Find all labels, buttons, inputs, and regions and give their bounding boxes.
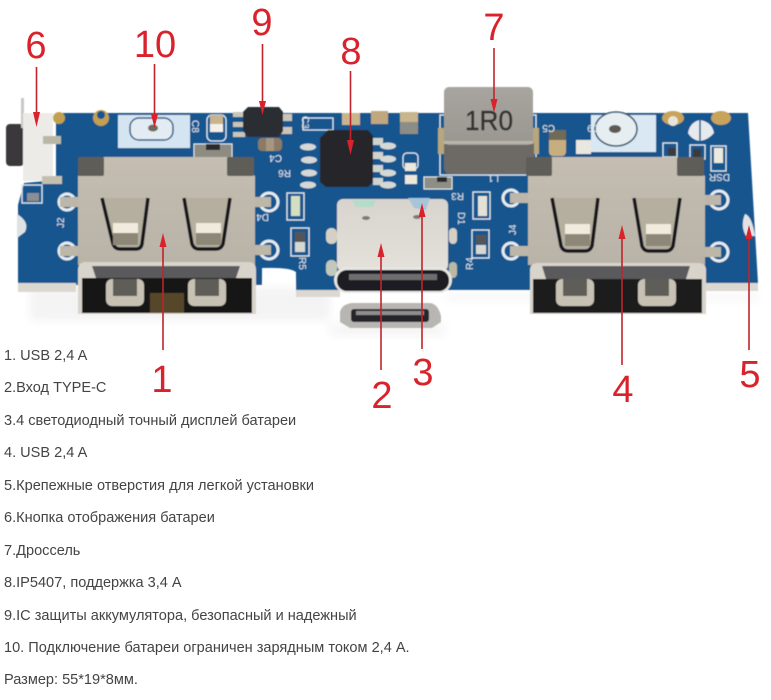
number 3 with arrow <box>412 203 434 394</box>
number 10 with arrow: 10 <box>134 24 176 66</box>
number 6 with arrow: 6 <box>25 25 47 67</box>
silk labels top left: C4 <box>269 152 282 163</box>
inductor 7 <box>438 87 539 175</box>
button 6 <box>6 98 62 203</box>
number 7 with arrow <box>483 7 505 113</box>
LEDs and resistors: J4 <box>508 224 519 235</box>
LEDs and resistors <box>287 172 519 270</box>
right top parts: DSR <box>709 171 730 182</box>
board lower edge highlight <box>18 283 758 297</box>
gold pads top right <box>662 111 731 142</box>
battery pad 10 <box>118 115 190 148</box>
capacitor C4 <box>258 138 282 151</box>
specification list: 9.IC защиты аккумулятора, безопасный и надежный <box>4 608 357 624</box>
right top parts <box>542 122 730 182</box>
resistor R7 <box>194 144 232 158</box>
LEDs and resistors: L1 <box>487 172 499 183</box>
silk labels top left <box>56 116 310 270</box>
USB port 4 <box>503 157 728 314</box>
number 10 with arrow <box>134 24 176 128</box>
number 4 with arrow: 4 <box>612 369 634 411</box>
photo: charging board <box>6 87 760 335</box>
mounting hole left <box>17 214 26 238</box>
number 7 with arrow: 7 <box>483 7 505 49</box>
number 2 with arrow <box>371 243 393 417</box>
specification list: 6.Кнопка отображения батареи <box>4 510 215 526</box>
mounting hole right <box>743 214 755 236</box>
specification list: 5.Крепежные отверстия для легкой установки <box>4 478 314 494</box>
number 5 with arrow: 5 <box>739 354 761 396</box>
IC 9 <box>233 107 292 137</box>
specification list: 2.Вход TYPE-C <box>4 380 106 396</box>
silk labels top left: R5 <box>296 257 307 270</box>
right top parts: C9 <box>587 122 600 133</box>
silk labels top left: R6 <box>278 167 291 178</box>
right top parts: C5 <box>542 122 555 133</box>
specification list: 7.Дроссель <box>4 543 80 559</box>
silk labels top left: C8 <box>189 120 200 133</box>
number 5 with arrow <box>739 225 761 396</box>
battery pad right <box>591 112 656 152</box>
number 3 with arrow: 3 <box>412 352 434 394</box>
specification list: Размер: 55*19*8мм. <box>4 672 138 688</box>
specification list: 3.4 светодиодный точный дисплей батареи <box>4 413 296 429</box>
number 2 with arrow: 2 <box>371 375 393 417</box>
specification list: 1. USB 2,4 A <box>4 348 88 364</box>
silk labels top left: C3 <box>299 116 310 129</box>
parts right of IC 8 <box>380 112 464 201</box>
silk labels top left: J2 <box>56 217 67 228</box>
micro USB port <box>340 303 441 328</box>
number 6 with arrow <box>25 25 47 127</box>
specification list: 4. USB 2,4 A <box>4 445 88 461</box>
small parts around IC 8 <box>300 111 388 188</box>
IC 8 <box>320 130 373 187</box>
LEDs and resistors: D1 <box>455 212 466 225</box>
number 9 with arrow <box>251 2 273 115</box>
specification list: 8.IP5407, поддержка 3,4 A <box>4 575 182 591</box>
parts right of IC 8: R3 <box>451 190 464 201</box>
number 4 with arrow <box>612 225 634 411</box>
inductor 7: 1R0 <box>465 105 513 136</box>
number 8 with arrow <box>340 31 362 155</box>
number 9 with arrow: 9 <box>251 2 273 44</box>
gold pads top left <box>53 110 109 126</box>
capacitor C8 <box>207 115 226 141</box>
number 1 with arrow <box>151 233 173 401</box>
board shadow <box>30 288 760 335</box>
number 8 with arrow: 8 <box>340 31 362 73</box>
number 1 with arrow: 1 <box>151 359 173 401</box>
USB port 1 <box>59 157 278 314</box>
silk labels top left: D4 <box>256 211 269 222</box>
specification list <box>4 348 410 688</box>
specification list: 10. Подключение батареи ограничен зарядным током 2,4 A. <box>4 640 410 656</box>
LEDs and resistors: R4 <box>465 257 476 270</box>
Type-C port <box>326 198 457 293</box>
board: blue PCB <box>18 113 758 292</box>
